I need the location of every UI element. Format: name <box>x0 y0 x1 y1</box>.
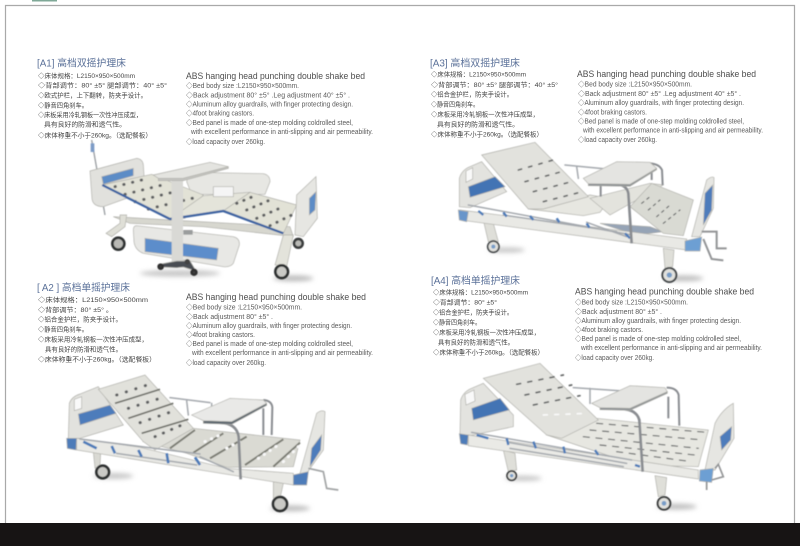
text block: A3 Chinese specs: 具有良好的防滑和透气性。 <box>437 119 519 128</box>
text block: A1 Chinese specs: ◇床体称重不小于260kg。（选配餐板） <box>38 130 152 139</box>
text block: A2 Chinese specs: ◇床体规格：L2150×950×500mm <box>38 295 148 304</box>
text block: A2 English specs: ◇4foot braking castors. <box>186 331 255 339</box>
text block: A4 Chinese specs: ◇床板采用冷轧钢板一次性冲压成型， <box>433 327 540 336</box>
text block: A2 Chinese specs: 具有良好的防滑和透气性。 <box>45 344 122 353</box>
text block: A1 Chinese specs: ◇背部调节：80° ±5° 腿部调节：40° ±5° <box>38 81 167 90</box>
text block: A2 Chinese specs <box>38 295 156 363</box>
text block: A2 English specs: ◇Aluminum alloy guardrails, with finger protecting design. <box>186 322 352 330</box>
heading: A3: [A3] 高档双摇护理床 <box>430 56 520 70</box>
text block: A2 Chinese specs: ◇静音四角刹车。 <box>38 324 88 333</box>
bottom black band <box>0 523 800 546</box>
heading: A2: [ A2 ] 高档单摇护理床 <box>37 281 130 294</box>
text block: A2 Chinese specs: ◇背部调节：80° ±5° 。 <box>38 305 113 314</box>
text block: A1 Chinese specs: ◇静音四角刹车。 <box>38 100 88 109</box>
heading: A4: [A4] 高档单摇护理床 <box>431 274 520 287</box>
text block: A1 Chinese specs: ◇床体规格：L2150×950×500mm <box>38 71 135 80</box>
text block: A2 English specs: ◇Bed panel is made of one-step molding coldrolled steel, <box>186 340 353 348</box>
text block: A3 English specs: ◇Bed panel is made of one-step molding coldrolled steel, <box>578 118 744 126</box>
text block: A3 English specs: with excellent performance in anti-slipping and air permeability. <box>582 128 763 134</box>
text block: A2 Chinese specs: ◇铝合金护栏，防夹手设计。 <box>38 315 122 324</box>
text block: A3 English specs: ◇Back adjustment 80° ±5° .Leg adjustment 40° ±5° . <box>578 90 741 98</box>
text block: A2 English specs: ◇Back adjustment 80° ±5° . <box>186 313 273 321</box>
text block: A1 Chinese specs <box>38 71 167 139</box>
text block: A1 English specs <box>186 71 373 146</box>
text block: A4 Chinese specs: ◇床体规格：L2150×950×500mm <box>433 288 528 297</box>
text block: A2 Chinese specs: ◇床板采用冷轧钢板一次性冲压成型， <box>38 334 148 343</box>
text block: A4 English specs: ◇Bed body size :L2150×950×500mm. <box>575 298 688 306</box>
text block: A4 English specs <box>575 287 762 362</box>
text block: A2 English specs: ◇load capacity over 260kg. <box>186 359 266 367</box>
text block: A1 English specs: ◇4foot braking castors. <box>186 110 254 118</box>
panel: A2 <box>37 281 373 511</box>
panel: A3 <box>430 56 763 282</box>
text block: A4 Chinese specs: 具有良好的防滑和透气性。 <box>438 337 514 346</box>
text block: A2 English specs <box>186 292 373 367</box>
text block: A4 Chinese specs <box>433 288 544 356</box>
text block: A4 English specs: ◇Aluminum alloy guardrails, with finger protecting design. <box>575 317 741 325</box>
text block: A1 English specs: ◇Bed body size :L2150×950×500mm. <box>186 82 299 90</box>
text block: A1 English specs: ◇Aluminum alloy guardrails, with finger protecting design. <box>186 100 353 108</box>
text block: A1 English specs: ◇Bed panel is made of one-step molding coldrolled steel, <box>186 119 353 127</box>
text block: A1 English specs: ◇Back adjustment 80° ±5° .Leg adjustment 40° ±5° . <box>186 92 350 100</box>
text block: A2 English specs: with excellent performance in anti-slipping and air permeability. <box>191 350 373 357</box>
panel: A4 <box>431 274 762 510</box>
text block: A4 Chinese specs: ◇背部调节：80° ±5° <box>433 298 497 307</box>
text block: A1 Chinese specs: ◇床板采用冷轧钢板一次性冲压成型， <box>38 110 142 119</box>
text block: A3 Chinese specs: ◇背部调节：80° ±5° 腿部调节：40° ±5° <box>431 80 558 89</box>
text block: A1 English specs: ◇load capacity over 260kg. <box>186 138 265 146</box>
panel: A1 <box>37 56 373 281</box>
text block: A4 English specs: ◇4foot braking castors. <box>575 326 643 334</box>
illustration: A3 double crank bed with raised panels <box>458 142 727 282</box>
text block: A3 English specs: ◇Aluminum alloy guardrails, with finger protecting design. <box>578 99 744 107</box>
illustration: A2 single crank bed <box>67 375 338 511</box>
text block: A1 Chinese specs: 具有良好的防滑和透气性。 <box>44 120 126 129</box>
text block: A1 Chinese specs: ◇欧式护栏，上下翻转，防夹手设计。 <box>38 90 147 99</box>
text block: A3 Chinese specs: ◇铝合金护栏，防夹手设计。 <box>431 89 513 98</box>
text block: A1 English specs: ABS hanging head punching double shake bed <box>186 71 365 82</box>
text block: A3 Chinese specs: ◇静音四角刹车。 <box>431 99 479 108</box>
top green tab <box>32 0 57 2</box>
text block: A4 English specs: ABS hanging head punching double shake bed <box>575 287 754 298</box>
illustration: A1 double crank bed with raised sections <box>90 140 317 281</box>
text block: A4 Chinese specs: ◇铝合金护栏，防夹手设计。 <box>433 308 513 317</box>
text block: A2 Chinese specs: ◇床体称重不小于260kg。（选配餐板） <box>38 354 156 363</box>
text block: A4 English specs: ◇load capacity over 260kg. <box>575 354 654 362</box>
text block: A4 Chinese specs: ◇静音四角刹车。 <box>433 318 481 327</box>
text block: A3 Chinese specs <box>431 69 558 138</box>
text block: A4 English specs: ◇Back adjustment 80° ±5° . <box>575 308 662 316</box>
text block: A3 English specs: ◇4foot braking castors. <box>578 108 647 116</box>
text block: A3 Chinese specs: ◇床板采用冷轧钢板一次性冲压成型， <box>431 109 539 118</box>
text block: A3 Chinese specs: ◇床体称重不小于260kg。（选配餐板） <box>431 129 543 138</box>
text block: A1 English specs: with excellent performance in anti-slipping and air permeability. <box>190 129 373 136</box>
heading: A1: [A1] 高档双摇护理床 <box>37 56 126 70</box>
text block: A4 English specs: with excellent performance in anti-slipping and air permeability. <box>580 345 762 352</box>
text block: A4 English specs: ◇Bed panel is made of one-step molding coldrolled steel, <box>575 335 741 343</box>
text block: A3 Chinese specs: ◇床体规格：L2150×950×500mm <box>431 69 526 78</box>
text block: A3 English specs <box>577 69 763 144</box>
text block: A3 English specs: ◇load capacity over 260kg. <box>578 136 657 144</box>
text block: A3 English specs: ABS hanging head punching double shake bed <box>577 69 756 80</box>
text block: A4 Chinese specs: ◇床体称重不小于260kg。（选配餐板） <box>433 347 544 356</box>
text block: A3 English specs: ◇Bed body size :L2150×950×500mm. <box>578 80 692 88</box>
illustration: A4 single crank bed with solid panel <box>459 363 734 510</box>
text block: A2 English specs: ◇Bed body size :L2150×950×500mm. <box>186 304 302 312</box>
text block: A2 English specs: ABS hanging head punching double shake bed <box>186 292 366 303</box>
